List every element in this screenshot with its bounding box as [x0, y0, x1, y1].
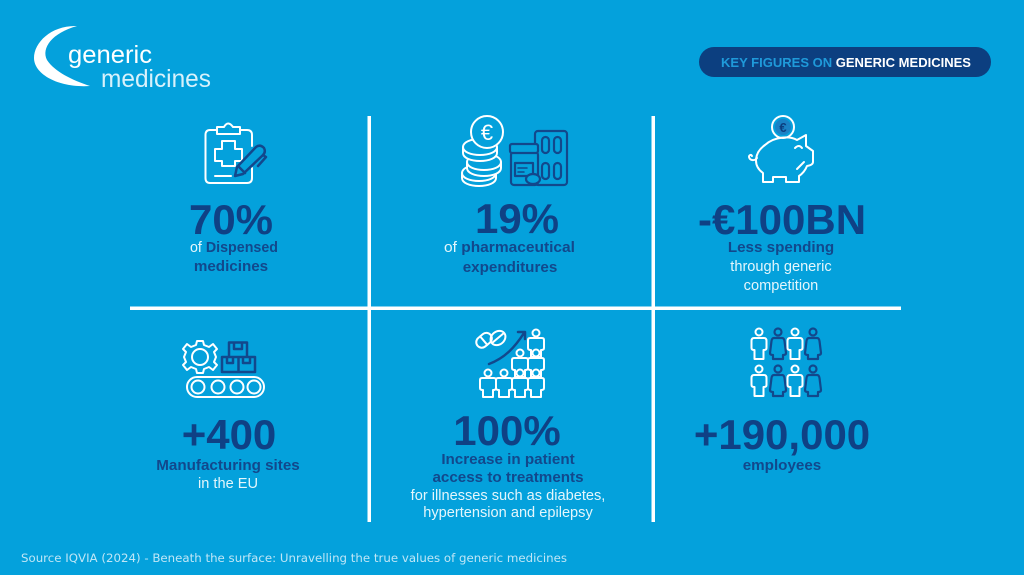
- header pill: key figures on generic medicines: KEY FIGURES ON GENERIC MEDICINES: [721, 55, 971, 70]
- icon: pills, rising arrow and people: [474, 328, 544, 397]
- icon: rows of people: [752, 328, 821, 396]
- panel: employees: [694, 328, 870, 474]
- label: less spending: Less spending: [728, 239, 834, 256]
- icon: clipboard with cross and pen: [206, 124, 266, 183]
- label: of dispensed medicines: of Dispensed: [190, 239, 278, 256]
- icon: euro coins and medicines: [462, 116, 567, 186]
- label: illnesses detail: for illnesses such as diabetes,: [411, 488, 605, 504]
- figure: +190,000: +190,000: [694, 411, 870, 458]
- label: employees: employees: [743, 457, 821, 474]
- label: through generic competition: competition: [744, 278, 818, 294]
- label: expenditures: expenditures: [463, 259, 557, 276]
- header pill: key figures on generic medicines: [699, 47, 991, 77]
- icon: gear, boxes and conveyor belt: [183, 341, 264, 397]
- panel: manufacturing sites: [156, 341, 300, 492]
- icon: euro coins and medicines: €: [481, 120, 493, 145]
- logo: generic medicines: [34, 26, 211, 93]
- panel: patient access: [411, 328, 605, 521]
- figure: +400: +400: [182, 411, 276, 458]
- source note: Source IQVIA (2024) - Beneath the surface: Unravelling the true values of generic medicines: [21, 552, 567, 565]
- label: medicines: medicines: [194, 258, 268, 275]
- panel: less spending: [698, 116, 866, 294]
- grid dividers: [130, 116, 901, 522]
- icon: piggy bank with euro coin: [749, 116, 813, 182]
- panel: dispensed medicines: [189, 124, 278, 275]
- label: illnesses detail: hypertension and epilepsy: [423, 505, 593, 521]
- label: in the EU: in the EU: [198, 476, 258, 492]
- logo: generic medicines: generic: [68, 41, 152, 69]
- panel: pharmaceutical expenditures: [444, 116, 575, 276]
- logo: generic medicines: medicines: [101, 65, 211, 93]
- figure: 70%: 70%: [189, 196, 273, 243]
- label: increase in patient access to treatments: Increase in patient: [441, 451, 575, 468]
- label: through generic competition: through generic: [730, 259, 832, 275]
- label: increase in patient access to treatments: access to treatments: [432, 469, 584, 486]
- figure: 19%: 19%: [475, 195, 559, 242]
- figure: minus 100 billion euros: -€100BN: [698, 196, 866, 243]
- figure: 100%: 100%: [453, 407, 561, 454]
- label: of pharmaceutical: of pharmaceutical: [444, 239, 575, 256]
- icon: piggy bank with euro coin: €: [779, 120, 787, 135]
- label: manufacturing sites: Manufacturing sites: [156, 457, 300, 474]
